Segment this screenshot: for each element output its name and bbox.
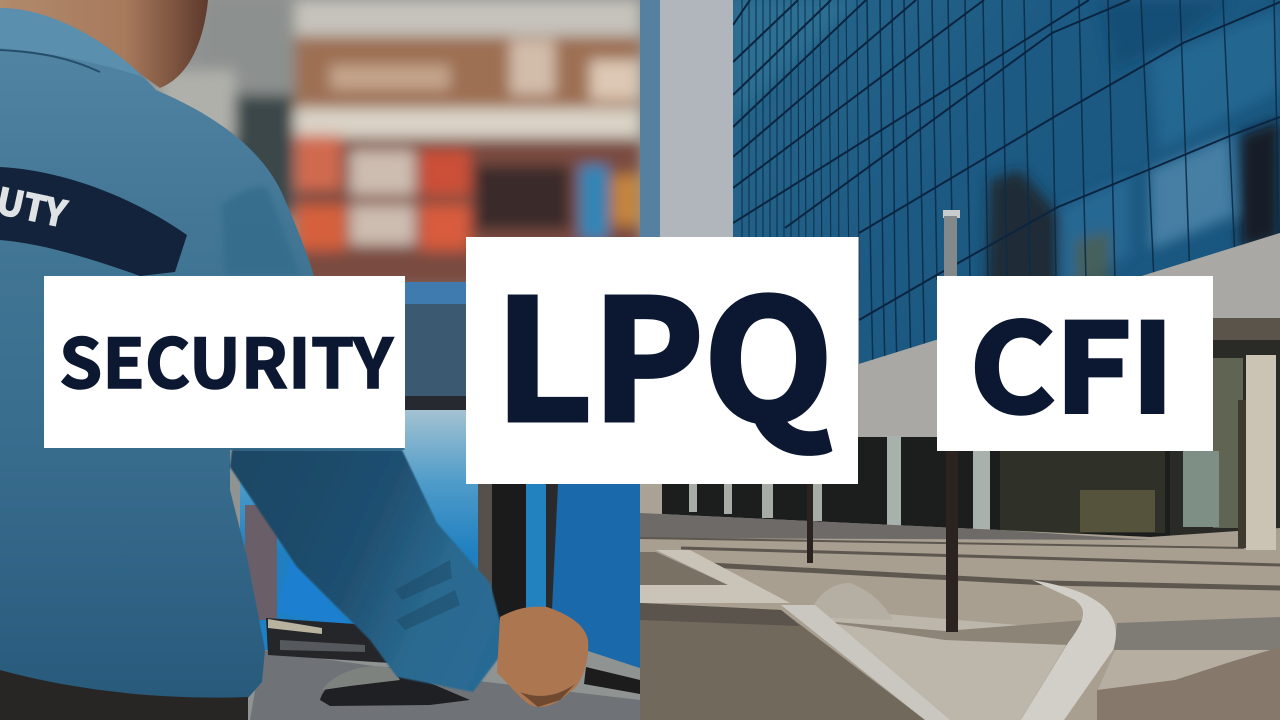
pavement xyxy=(640,513,1280,720)
label card: LPQ: LPQ xyxy=(495,227,833,468)
shoulder band xyxy=(0,167,187,276)
guard neck xyxy=(0,0,208,88)
label card: CFI: CFI xyxy=(970,271,1174,448)
desk and keyboard xyxy=(250,650,640,720)
white pavement strips xyxy=(640,550,790,603)
pavement bump xyxy=(809,583,893,620)
panel: security guard photo (left) xyxy=(0,0,640,720)
sleeve seam shade xyxy=(222,187,300,275)
hand xyxy=(497,607,588,707)
ground-floor lobby xyxy=(660,437,1280,537)
label card: CFI xyxy=(937,271,1213,451)
lamp posts xyxy=(946,451,958,632)
panel: office building photo (right) xyxy=(640,0,1280,720)
collar xyxy=(0,8,156,90)
monitors xyxy=(405,282,640,397)
blurred store background xyxy=(160,0,640,288)
shadows on pavement xyxy=(811,620,1085,645)
lower building band xyxy=(859,233,1280,440)
label card: SECURITY xyxy=(44,276,405,448)
glass grid xyxy=(742,0,859,280)
shirt body xyxy=(0,8,405,698)
plaza pillar xyxy=(1246,355,1276,550)
right side desk bar xyxy=(584,667,640,694)
label card: SECURITY: SECURITY xyxy=(59,309,394,408)
belt xyxy=(0,670,248,720)
column xyxy=(640,0,660,240)
mouse xyxy=(320,667,470,706)
tile patches xyxy=(640,552,728,585)
reflections on glass xyxy=(737,0,1280,276)
pale central paving xyxy=(781,605,1075,720)
pavement stripes xyxy=(640,538,1280,588)
arm sleeve xyxy=(230,450,507,692)
glass facade xyxy=(733,0,1280,370)
